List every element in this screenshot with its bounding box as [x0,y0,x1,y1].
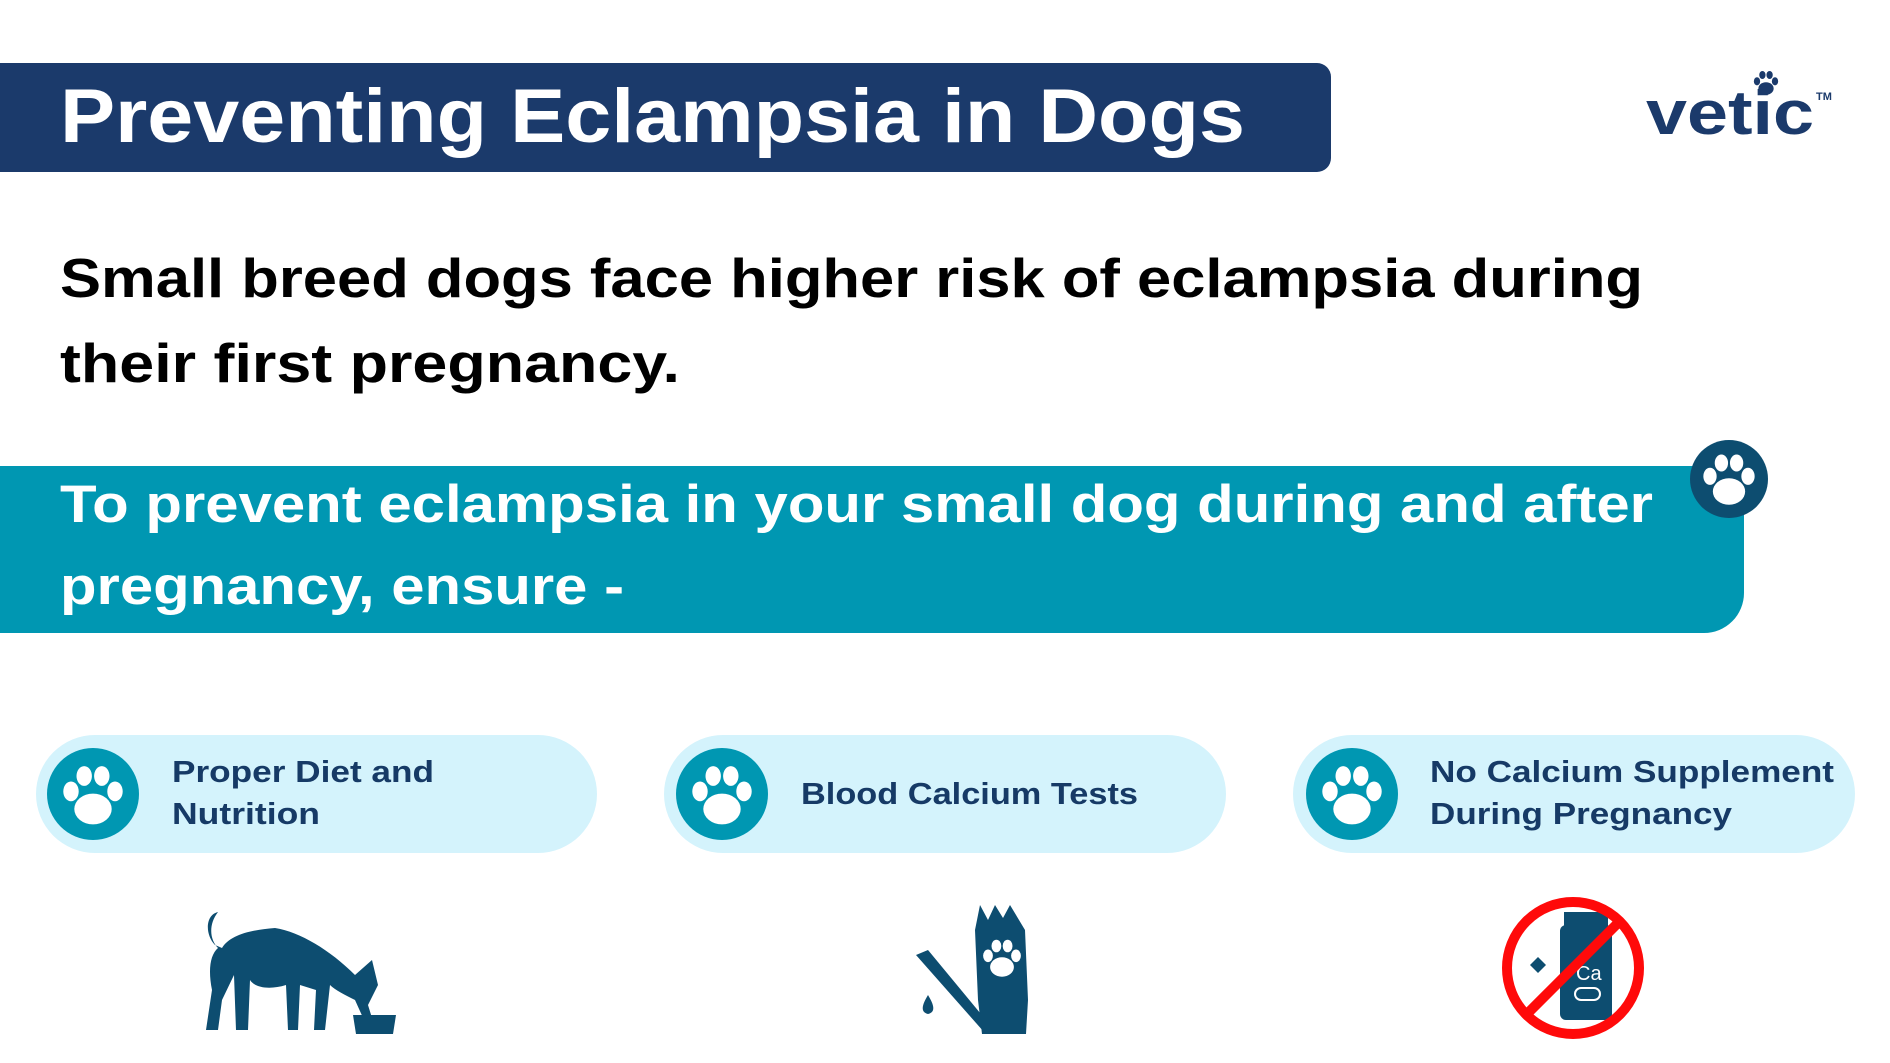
pill: no calcium [1293,735,1855,853]
subtitle text: Small breed dogs face higher risk of eclampsia during [60,247,1643,309]
pill: no calcium: During Pregnancy [1430,796,1733,831]
logo: vetic [1646,71,1832,148]
pill: proper diet: Proper Diet and [172,754,434,789]
icon: no calcium supplement [1507,902,1639,1034]
pill: blood calcium [664,735,1226,853]
teal banner [0,466,1744,633]
pill: blood calcium: Blood Calcium Tests [801,776,1138,811]
icon: no calcium supplement: Ca [1576,963,1602,985]
pill: no calcium: No Calcium Supplement [1430,754,1834,789]
icon: blood test paw [916,905,1028,1034]
teal banner: pregnancy, ensure - [60,557,624,616]
pill: proper diet: Nutrition [172,796,320,831]
title bar: Preventing Eclampsia in Dogs [60,74,1245,159]
teal banner: To prevent eclampsia in your small dog during and after [60,475,1653,534]
pill: proper diet [36,735,597,853]
title bar [0,63,1331,172]
subtitle text [60,247,1643,394]
icon: paw badge [1690,440,1768,518]
subtitle text: their first pregnancy. [60,332,680,394]
icon: dog eating [206,912,396,1034]
logo: vetic: TM [1816,91,1832,103]
logo: vetic: vetic [1646,79,1814,148]
